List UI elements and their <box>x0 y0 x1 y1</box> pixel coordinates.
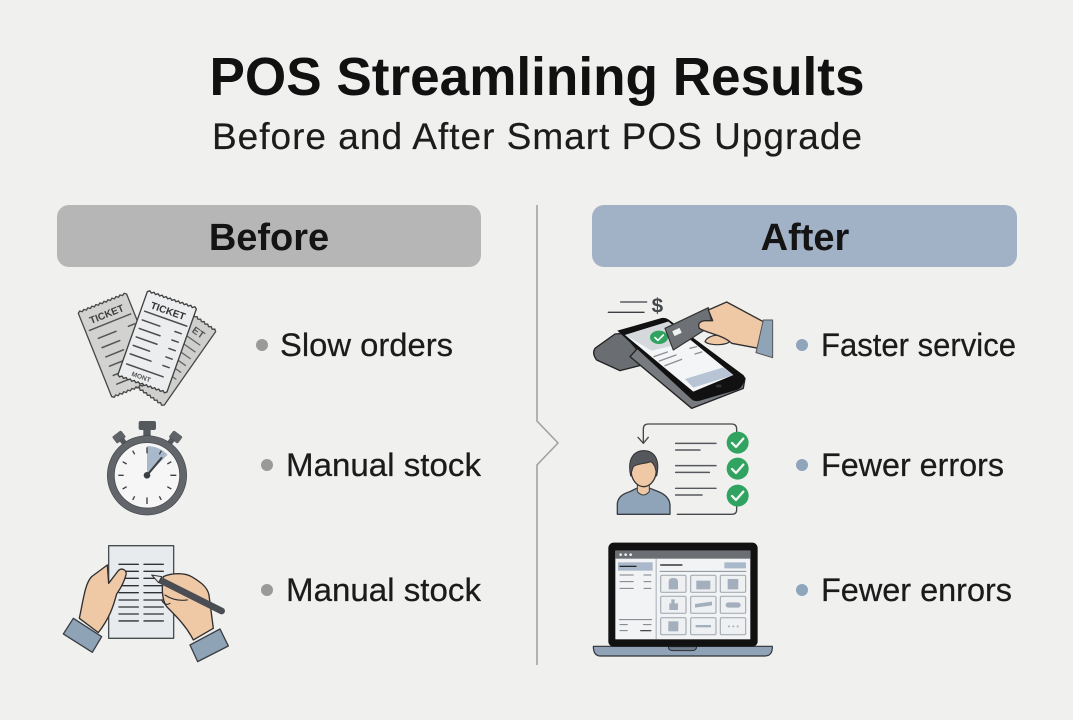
left hand <box>79 565 126 633</box>
left cuff <box>63 618 102 652</box>
icon: tickets <box>78 290 217 406</box>
bullet text: slow orders: Slow orders <box>280 327 453 363</box>
bullet text: fewer enrors: Fewer enrors <box>821 572 1012 608</box>
icon: POS terminal with card payment: $ <box>652 294 664 317</box>
lid <box>608 543 758 647</box>
divider with chevron <box>537 205 558 665</box>
hand <box>699 302 763 348</box>
base <box>593 646 772 656</box>
hair <box>630 451 658 476</box>
back left ticket: TICKET <box>88 303 126 327</box>
pen <box>160 580 222 611</box>
card <box>665 308 712 350</box>
right hand <box>162 574 213 640</box>
product grid <box>661 575 746 635</box>
toolbar <box>661 563 682 567</box>
icon: person with checklist <box>617 424 749 514</box>
fingers under card <box>705 335 730 345</box>
before header: Before <box>209 217 329 259</box>
list lines <box>676 443 716 495</box>
paper <box>109 546 174 638</box>
sleeve <box>756 320 773 358</box>
sidebar <box>655 559 658 639</box>
icon: laptop with POS dashboard <box>593 543 772 656</box>
bullet text: fewer errors: Fewer errors <box>821 447 1004 483</box>
title: POS Streamlining Results <box>210 47 864 107</box>
right cuff <box>190 629 228 662</box>
panel: after <box>592 205 1017 656</box>
tablet body <box>617 318 745 401</box>
device edge <box>630 320 745 408</box>
stand <box>594 333 648 371</box>
green checks <box>727 432 749 454</box>
after header <box>592 205 1017 267</box>
bullet text: manual stock: Manual stock <box>286 447 482 483</box>
back right ticket: ET <box>190 325 206 341</box>
icon: hands writing on paper <box>63 546 228 662</box>
head <box>631 453 656 487</box>
icon: POS terminal with card payment <box>594 294 773 408</box>
subtitle: Before and After Smart POS Upgrade <box>212 116 862 157</box>
loop arrow <box>638 424 737 443</box>
after header: After <box>761 217 850 259</box>
bullet text: manual stock 2: Manual stock <box>286 572 482 608</box>
front ticket: TICKET <box>149 301 187 323</box>
panel: before <box>57 205 482 662</box>
bullet text: faster service: Faster service <box>821 327 1016 363</box>
front ticket <box>117 290 197 394</box>
motion lines and dollar sign <box>608 302 647 312</box>
front ticket: MONT <box>131 371 151 384</box>
person body <box>617 488 670 514</box>
before header <box>57 205 481 267</box>
icon: stopwatch <box>107 421 187 515</box>
screen <box>625 322 733 392</box>
